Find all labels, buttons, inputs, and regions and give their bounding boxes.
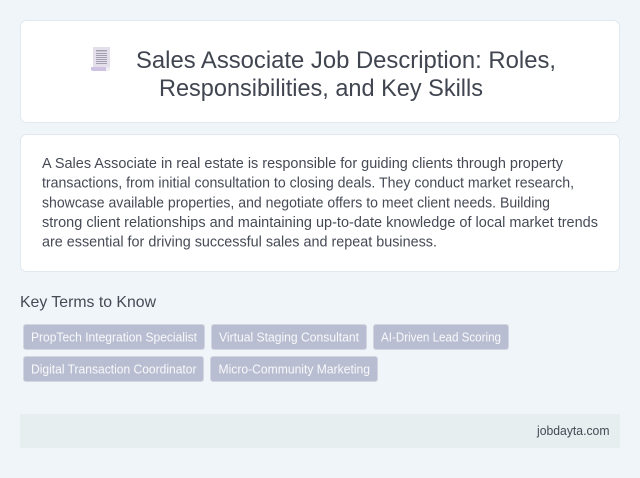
title: Responsibilities, and Key Skills [159,75,483,102]
description text: strong client relationships and maintaining up-to-date knowledge of local market trends [42,215,598,231]
heading: key terms: Key Terms to Know [20,294,156,311]
footer bar [20,414,620,448]
tag: Micro-Community Marketing [210,356,378,382]
description text: transactions, from initial consultation to closing deals. They conduct market research, [42,176,574,192]
footer text: jobdayta.com [536,424,610,438]
icon: document scroll [91,47,110,71]
tag: Virtual Staging Consultant: Virtual Staging Consultant [219,330,360,344]
panel: title card [20,20,620,122]
tag: Micro-Community Marketing: Micro-Community Marketing [218,362,370,376]
tag: Digital Transaction Coordinator [24,356,204,382]
description text: A Sales Associate in real estate is responsible for guiding clients through property [42,156,564,172]
tag: Digital Transaction Coordinator: Digital Transaction Coordinator [31,362,196,376]
tag: AI-Driven Lead Scoring: AI-Driven Lead Scoring [381,330,501,344]
tag: PropTech Integration Specialist [24,324,204,350]
description text: are essential for driving successful sales and repeat business. [42,234,437,250]
tag: PropTech Integration Specialist: PropTech Integration Specialist [31,330,198,344]
panel: description card [20,134,620,272]
description text: showcase available properties, and negotiate offers to meet client needs. Building [42,196,550,212]
description text [42,156,598,250]
tag: AI-Driven Lead Scoring [374,324,508,350]
title: Sales Associate Job Description: Roles, [136,47,556,74]
tag: Virtual Staging Consultant [212,324,366,350]
title [136,47,556,102]
